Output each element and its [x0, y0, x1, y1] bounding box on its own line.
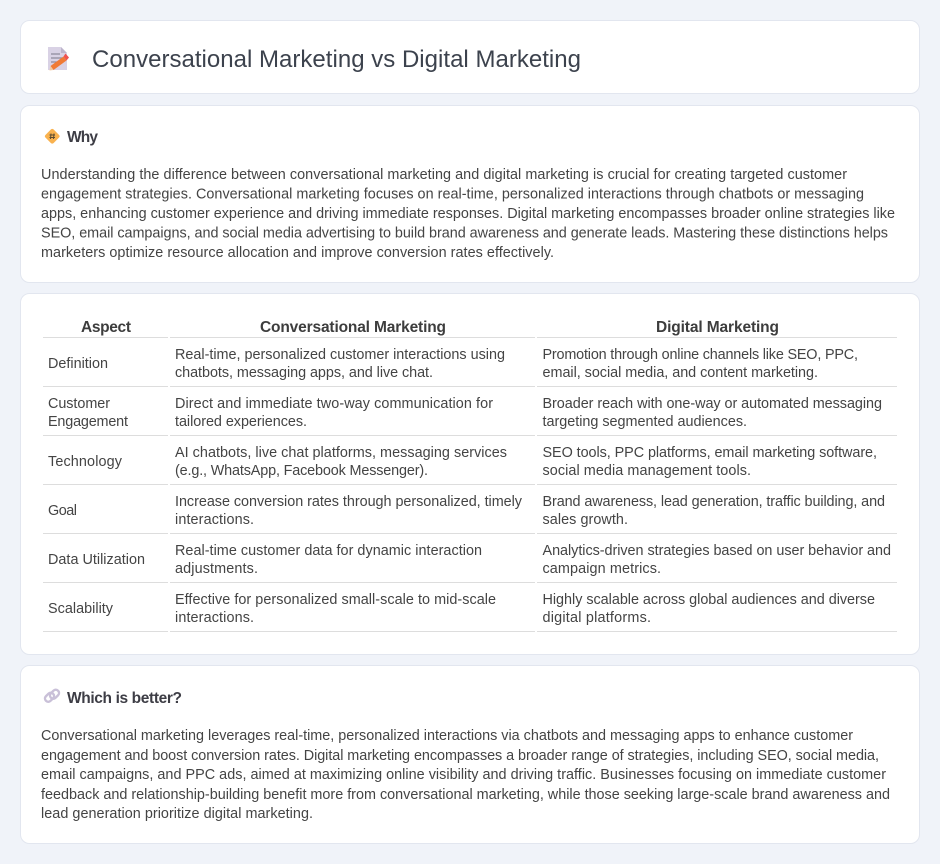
title: Conversational Marketing vs Digital Marketing [92, 46, 581, 73]
row: technology: (e.g., WhatsApp, Facebook Messenger). [175, 463, 428, 479]
row: definition: Real-time, personalized customer interactions using [175, 347, 505, 363]
row: customer engagement: Direct and immediate two-way communication for [175, 396, 493, 412]
row: technology: social media management tools. [542, 463, 751, 479]
text block: which is better paragraph: email campaigns, and PPC ads, aimed at maximizing online visibility and driving traffic. Businesses focusing on immediate customer [41, 767, 886, 783]
text block: why paragraph: apps, enhancing customer experience and driving immediate responses. Digital marketing encompasses broader online strategies like [41, 206, 895, 222]
text block: which is better paragraph: Conversational marketing leverages real-time, personalized interactions via chatbots and messaging apps to enhance customer [41, 728, 853, 744]
row: scalability [43, 592, 897, 632]
row: data utilization [43, 543, 897, 582]
row: definition [43, 347, 897, 386]
row: goal: Brand awareness, lead generation, traffic building, and [542, 494, 885, 510]
row: customer engagement: Engagement [48, 414, 128, 430]
text block: why paragraph: marketers optimize resource allocation and improve conversion rates effectively. [41, 245, 554, 261]
heading: why: Why [67, 129, 98, 146]
table header: Aspect [81, 319, 131, 336]
panel: why [20, 106, 920, 282]
text block: why paragraph [41, 167, 895, 261]
text block: why paragraph: engagement strategies. Conversational marketing focuses on real-time, personalized interactions through chatbots or messaging [41, 186, 864, 202]
row: scalability: Effective for personalized small-scale to mid-scale [175, 592, 496, 608]
row: technology [43, 445, 897, 484]
row: goal: sales growth. [542, 512, 628, 528]
row: data utilization: adjustments. [175, 561, 258, 577]
row: scalability: Highly scalable across global audiences and diverse [542, 592, 875, 608]
row: goal: Increase conversion rates through personalized, timely [175, 494, 523, 510]
heading: which is better: Which is better? [67, 690, 182, 707]
row: definition: Definition [48, 356, 108, 372]
text block: why paragraph: SEO, email campaigns, and social media advertising to build brand awareness and generate leads. Mastering these distinctions helps [41, 226, 888, 242]
row: goal: Goal [48, 503, 77, 519]
row: technology: AI chatbots, live chat platforms, messaging services [175, 445, 507, 461]
table header [43, 319, 897, 338]
row: definition: chatbots, messaging apps, and live chat. [175, 365, 433, 381]
text block: why paragraph: Understanding the difference between conversational marketing and digital marketing is crucial for creating targeted customer [41, 167, 847, 183]
row: scalability: Scalability [48, 601, 114, 617]
row: data utilization: Data Utilization [48, 552, 145, 568]
row: customer engagement: targeting segmented audiences. [542, 414, 747, 430]
row: customer engagement: Customer [48, 396, 110, 412]
table header: Conversational Marketing [260, 319, 446, 336]
text block: which is better paragraph: engagement and boost conversion rates. Digital marketing encompasses a broader range of strategies, including SEO, social media, [41, 748, 879, 764]
row: goal [43, 494, 897, 534]
row: technology: SEO tools, PPC platforms, email marketing software, [542, 445, 877, 461]
text block: which is better paragraph [41, 728, 890, 822]
panel: title header [20, 20, 920, 94]
panel: comparison table [20, 294, 920, 654]
row: customer engagement [43, 396, 897, 436]
row: data utilization: Analytics-driven strategies based on user behavior and [542, 543, 891, 559]
icon: memo with pencil [48, 47, 69, 70]
row: scalability: digital platforms. [542, 610, 651, 626]
icon: link [44, 688, 60, 703]
text block: which is better paragraph: lead generation prioritize digital marketing. [41, 806, 313, 822]
row: customer engagement: Broader reach with one-way or automated messaging [542, 396, 882, 412]
row: scalability: interactions. [175, 610, 254, 626]
panel: which is better [20, 666, 920, 844]
row: definition: Promotion through online channels like SEO, PPC, [542, 347, 858, 363]
text block: which is better paragraph: feedback and relationship-building benefit more from conversational marketing, while those seeking large-scale brand awareness and [41, 787, 890, 803]
table header: Digital Marketing [656, 319, 779, 336]
row: customer engagement: tailored experiences. [175, 414, 307, 430]
row: data utilization: campaign metrics. [542, 561, 661, 577]
row: technology: Technology [48, 454, 123, 470]
row: data utilization: Real-time customer data for dynamic interaction [175, 543, 482, 559]
icon: warning diamond [44, 128, 60, 144]
row: definition: email, social media, and content marketing. [542, 365, 818, 381]
row: goal: interactions. [175, 512, 254, 528]
